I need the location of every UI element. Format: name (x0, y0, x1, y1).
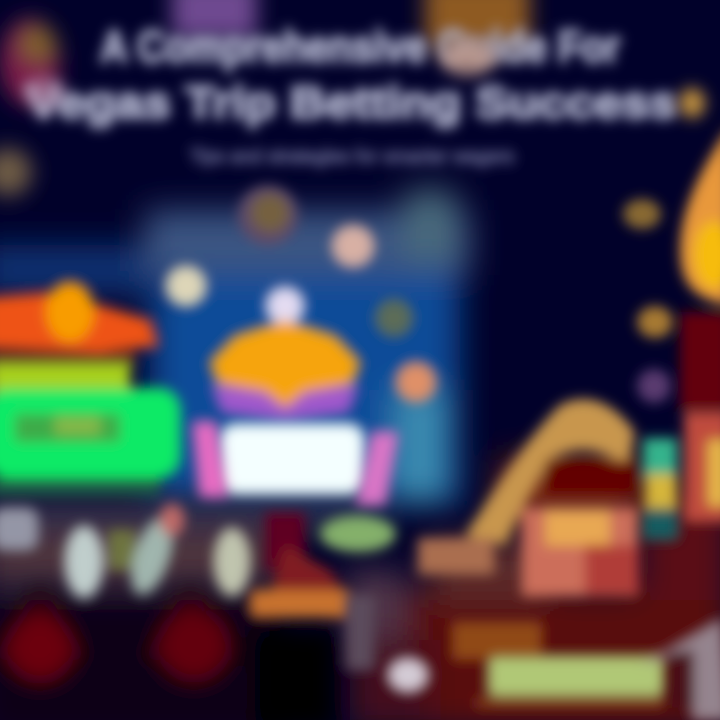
bottom right grey structure (640, 618, 720, 720)
title glow accents (25, 40, 705, 118)
title (27, 21, 677, 128)
right casino building (418, 399, 639, 660)
central machine: white screen (220, 424, 364, 494)
right coloured column (642, 438, 678, 540)
title: Vegas Trip Betting Success (27, 77, 677, 128)
white light bottom centre (346, 595, 428, 692)
central machine: orange diamond top (210, 287, 360, 420)
subtitle: Tips and strategies for smarter wagers (190, 146, 514, 168)
left neon sign: green panel (0, 362, 180, 496)
bottom right green sign (475, 656, 665, 708)
right flame tower (680, 125, 720, 522)
blue central backdrop panel (0, 190, 470, 505)
title: A Comprehensive Guide For (100, 21, 620, 72)
floating chips (166, 185, 673, 403)
pedestal shadow (255, 630, 335, 720)
left neon sign: red top (0, 282, 158, 366)
central machine: pink side columns (193, 422, 398, 505)
red stool seats (0, 585, 240, 684)
right casino building base (345, 460, 720, 720)
decorative top orbs (0, 0, 530, 196)
central pedestal (250, 512, 396, 618)
row of glowing slot machines (0, 504, 250, 599)
machine row backdrop (0, 498, 380, 720)
